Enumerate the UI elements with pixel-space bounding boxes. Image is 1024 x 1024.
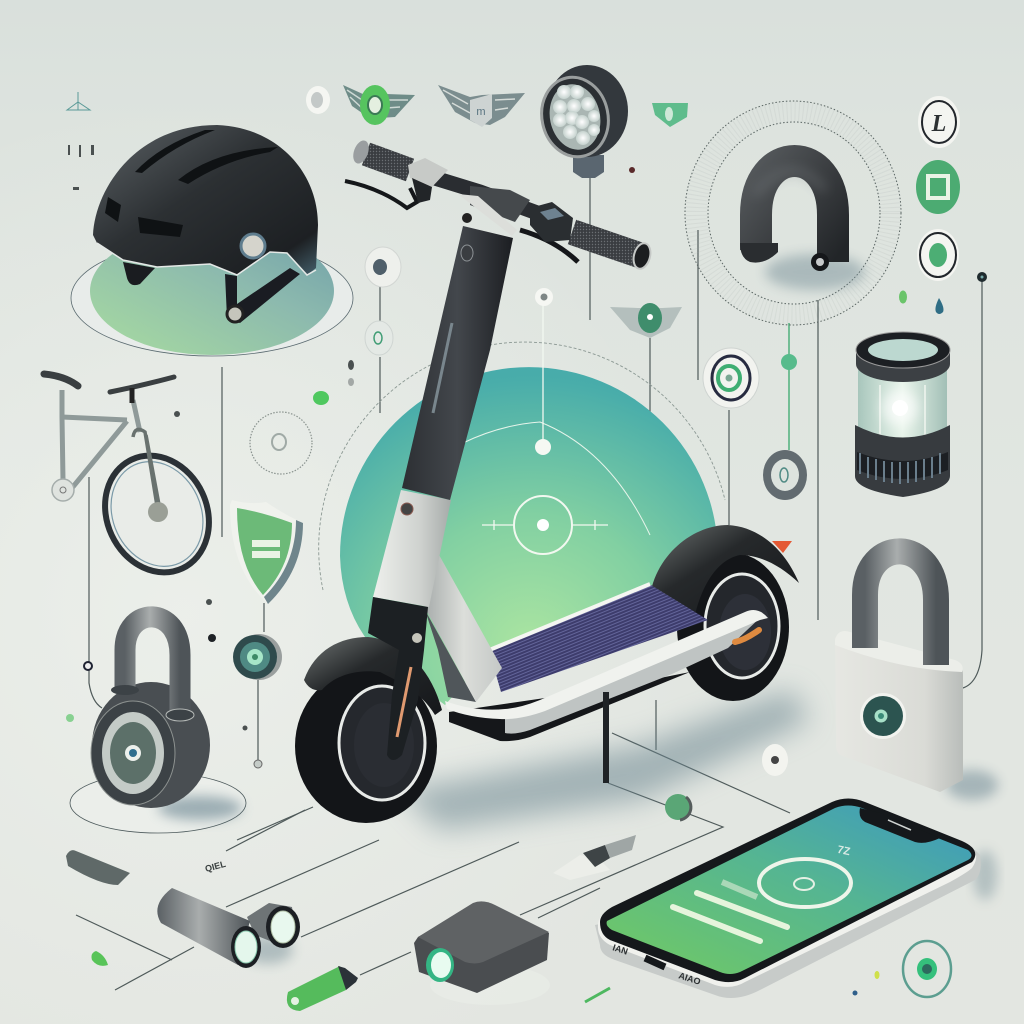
winged badge 2: m bbox=[476, 106, 486, 118]
helmet platform bbox=[71, 227, 353, 356]
smartphone: IAN bbox=[611, 942, 629, 957]
padlock left bbox=[70, 617, 246, 833]
target badge bbox=[703, 348, 759, 408]
tiny marks bbox=[68, 145, 635, 730]
winged badge 2 bbox=[438, 85, 525, 127]
small round marker bbox=[762, 744, 788, 776]
lantern bbox=[855, 332, 950, 497]
deck bbox=[445, 584, 768, 783]
scooter bbox=[295, 138, 799, 823]
helmet bbox=[71, 125, 353, 356]
rear wheel bbox=[649, 525, 799, 701]
dotted circle bbox=[685, 101, 901, 325]
green connector line bbox=[788, 323, 790, 450]
bicycle bbox=[44, 374, 228, 590]
shield badge bbox=[230, 500, 303, 604]
leaf badge bbox=[917, 229, 959, 281]
smartphone: 7Z bbox=[836, 844, 851, 858]
key tool bbox=[553, 835, 636, 880]
small dial badges bbox=[66, 247, 807, 722]
large padlock right bbox=[835, 551, 998, 800]
smartphone bbox=[595, 798, 997, 998]
handlebar bbox=[345, 138, 653, 271]
projector bbox=[414, 901, 550, 1005]
scooter shadow bbox=[400, 690, 810, 830]
green square badge bbox=[916, 160, 960, 214]
tiny text: QIEL bbox=[204, 859, 227, 874]
thin connector lines bbox=[76, 177, 982, 990]
stem bbox=[402, 226, 513, 500]
green ball bbox=[665, 794, 691, 820]
L badge bbox=[918, 96, 960, 148]
headlight bbox=[534, 65, 628, 178]
u-lock bbox=[740, 161, 865, 290]
small green shield bbox=[652, 103, 688, 127]
disc behind scooter bbox=[319, 288, 725, 705]
bottom badges bbox=[92, 941, 951, 1002]
top-left wing icon bbox=[67, 92, 90, 110]
grey ring badge bbox=[763, 450, 807, 500]
right column badges bbox=[899, 96, 987, 314]
dial: green ring bbox=[365, 321, 393, 355]
winged badge 1 bbox=[343, 85, 415, 125]
front wheel bbox=[295, 597, 442, 823]
grey tag bbox=[66, 850, 130, 885]
smartphone: AIAO bbox=[677, 970, 702, 987]
L badge: L bbox=[931, 111, 946, 137]
stem lower white bbox=[373, 490, 502, 702]
small ring badge bbox=[233, 634, 282, 768]
dial: top bbox=[365, 247, 401, 287]
ring icon bbox=[306, 86, 330, 114]
usb stick bbox=[287, 966, 358, 1011]
dotted gauge bbox=[250, 412, 312, 474]
small wing badge bbox=[610, 303, 682, 338]
flashlight bbox=[157, 888, 300, 968]
